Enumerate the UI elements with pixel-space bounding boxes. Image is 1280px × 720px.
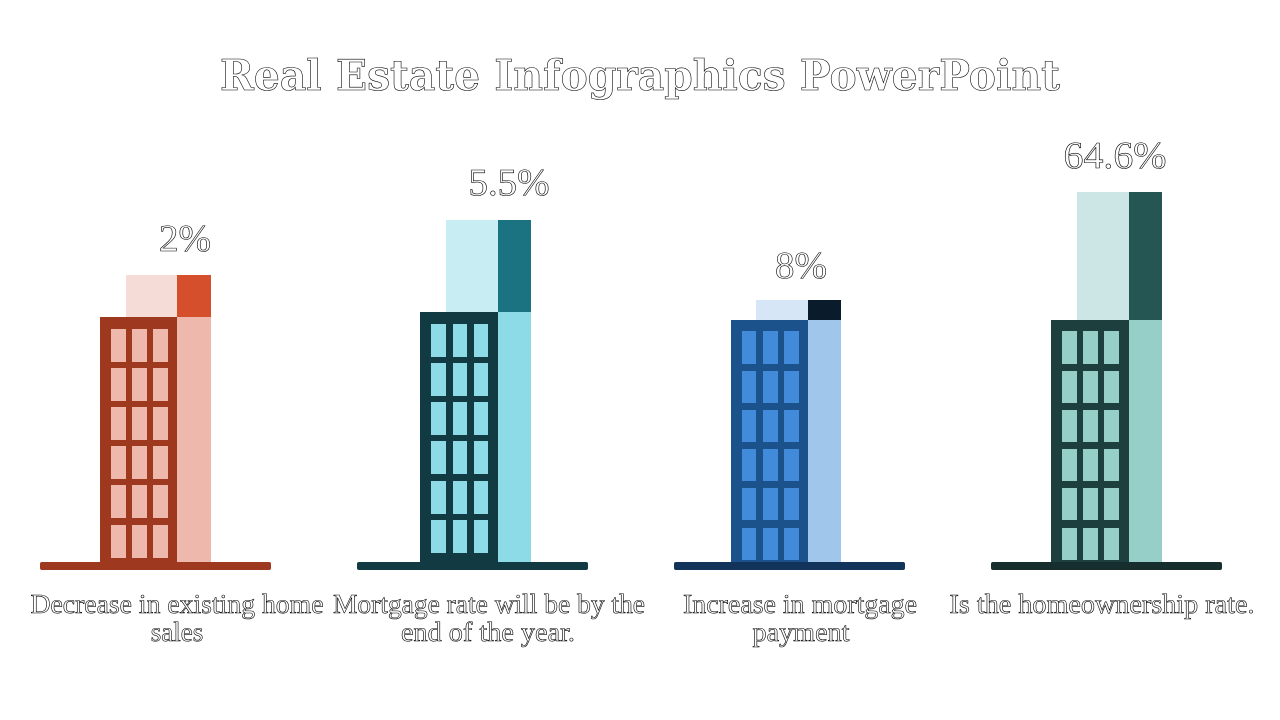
title: Real Estate Infographics PowerPoint [220,51,1061,100]
icon: blue building [674,300,905,570]
value: 2%: 2% [159,218,211,260]
icon: red building [40,275,271,570]
caption: payment [752,617,850,647]
value: 64.6%: 64.6% [1064,135,1166,177]
panel: mortgage rate [333,162,645,647]
caption: Increase in mortgage [683,589,917,619]
caption: end of the year. [401,617,575,647]
icon: teal building [357,220,588,570]
icon: green building [991,192,1222,570]
value: 5.5%: 5.5% [468,162,550,204]
caption: sales [151,617,203,647]
caption: Decrease in existing home [30,589,324,619]
caption: Is the homeownership rate. [950,589,1254,619]
panel: decrease in existing home sales [30,218,324,647]
panel: increase in mortgage payment [674,245,917,647]
panel: homeownership rate [950,135,1254,619]
caption: Mortgage rate will be by the [333,589,645,619]
value: 8%: 8% [775,245,827,287]
